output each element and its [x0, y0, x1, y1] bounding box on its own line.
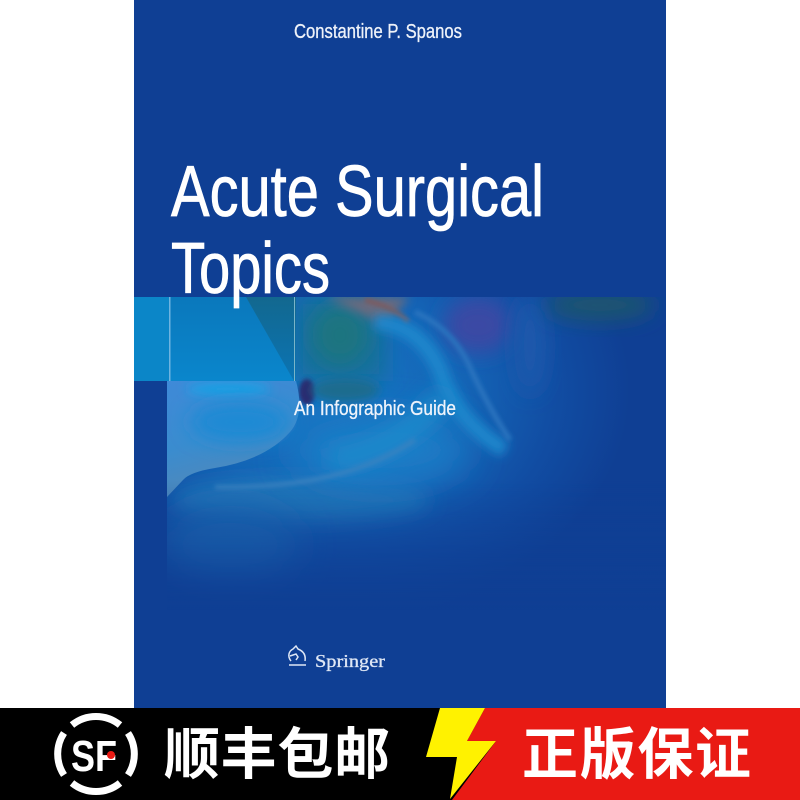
bottom banner [0, 708, 800, 800]
icon: yellow lightning bolt [426, 708, 496, 799]
subtitle: An Infographic Guide [294, 398, 456, 420]
red panel [452, 708, 800, 800]
author name: Constantine P. Spanos [294, 21, 462, 43]
shipping label: 顺丰包邮 [164, 723, 390, 786]
title [171, 152, 544, 309]
book cover panel [134, 0, 666, 708]
title: Acute Surgical [171, 152, 544, 232]
icon: chess knight [289, 646, 306, 665]
title: Topics [171, 229, 330, 309]
publisher name: Springer [315, 651, 385, 671]
cover artwork: fluid swirl [134, 297, 656, 576]
icon: SF logo [58, 716, 134, 792]
publisher logo: Springer [289, 646, 385, 671]
icon: SF logo: SF [71, 732, 117, 781]
upper left light band [134, 297, 170, 381]
lower pale curved shape [167, 381, 299, 497]
black strip [0, 708, 800, 800]
authenticity label: 正版保证 [522, 723, 751, 786]
